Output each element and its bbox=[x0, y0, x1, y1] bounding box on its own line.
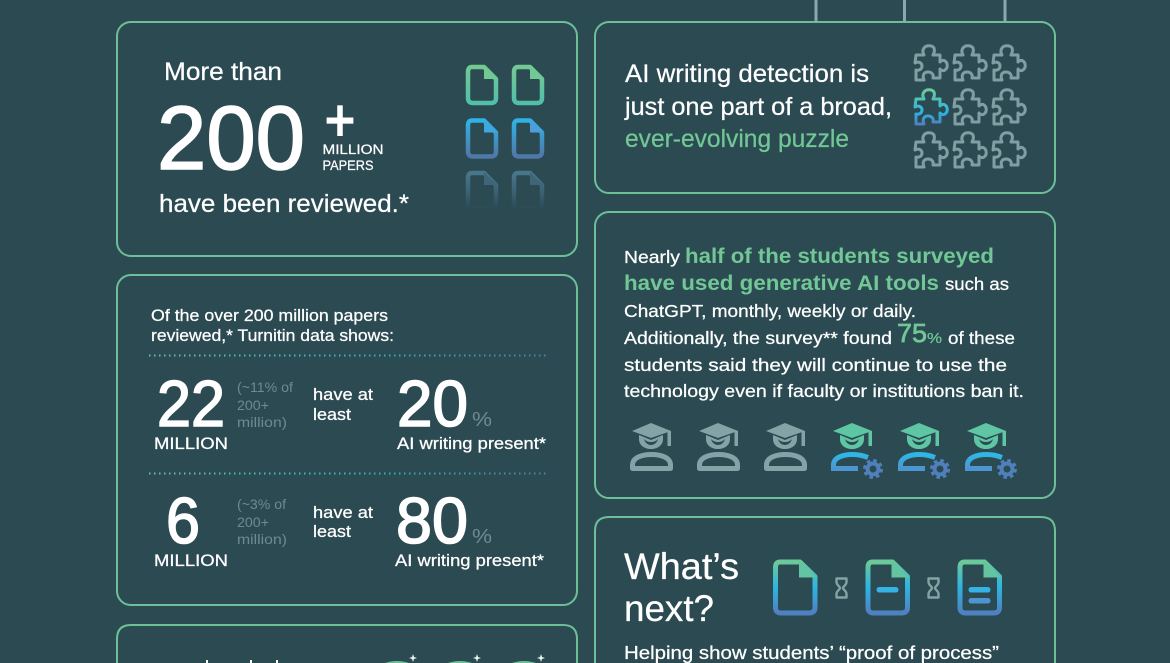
panel: students bbox=[595, 212, 1055, 498]
icon: gray student bbox=[699, 423, 738, 468]
heading text: AI writing detection is bbox=[625, 60, 869, 88]
survey paragraph: students said they will continue to use the bbox=[624, 355, 1007, 375]
heading bbox=[624, 546, 739, 629]
stat: 6 million bbox=[154, 484, 228, 570]
icon: document with two lines bbox=[960, 560, 1001, 613]
stat: 22 million: MILLION bbox=[154, 435, 228, 453]
text: have at least: have at bbox=[313, 504, 373, 522]
survey paragraph: % bbox=[927, 330, 942, 347]
survey paragraph: Nearly bbox=[624, 247, 680, 267]
intro text bbox=[151, 307, 394, 345]
icon: student with gear bbox=[967, 423, 1016, 478]
note: 11 percent: million) bbox=[237, 415, 287, 430]
million papers label bbox=[322, 142, 384, 173]
icon: gray student bbox=[766, 423, 805, 468]
survey paragraph: technology even if faculty or institutions ban it. bbox=[624, 381, 1024, 401]
heading text: ever-evolving puzzle bbox=[625, 125, 849, 153]
text: have at least bbox=[313, 504, 373, 541]
icon: sparkle circles, cropped bbox=[385, 654, 545, 663]
heading: What’s bbox=[624, 546, 739, 587]
text: have at least: least bbox=[313, 523, 351, 541]
intro text: reviewed,* Turnitin data shows: bbox=[151, 327, 394, 345]
text: have been reviewed: have been reviewed.* bbox=[159, 190, 409, 218]
note: 3 percent: million) bbox=[237, 532, 287, 547]
note: 3 percent: 200+ bbox=[237, 515, 269, 530]
note: 11 percent: (~11% of bbox=[237, 380, 293, 395]
stat: 80 percent: 80 bbox=[396, 484, 468, 557]
survey paragraph bbox=[624, 245, 1024, 401]
panel: cropped bottom-left bbox=[117, 625, 577, 663]
stat: 80 percent: % bbox=[472, 526, 492, 548]
icon: student with gear bbox=[900, 423, 948, 478]
heading: next? bbox=[624, 588, 714, 629]
stat: 20 percent: AI writing present* bbox=[397, 435, 547, 453]
survey paragraph: such as bbox=[945, 274, 1009, 294]
icon: blank document bbox=[776, 560, 816, 613]
text: have at least: least bbox=[313, 406, 351, 424]
stat: 20 percent bbox=[397, 367, 547, 453]
icon: document grid bbox=[468, 66, 543, 209]
icon: document with one line bbox=[868, 560, 909, 613]
connector lines at top bbox=[816, 0, 1005, 22]
note: 3 percent bbox=[237, 497, 287, 547]
survey paragraph: have used generative AI tools bbox=[624, 272, 939, 295]
stat: 6 million: MILLION bbox=[154, 552, 228, 570]
icon: hourglass bbox=[836, 578, 846, 598]
panel: 200 million papers bbox=[117, 22, 577, 256]
icon: hourglass bbox=[928, 578, 938, 598]
icon: gray student bbox=[632, 423, 671, 468]
heading text: just one part of a broad, bbox=[624, 93, 892, 121]
icon: student with gear bbox=[833, 423, 882, 478]
stat: 80 percent bbox=[395, 484, 545, 570]
survey paragraph: ChatGPT, monthly, weekly or daily. bbox=[624, 301, 916, 321]
stat: 20 percent: 20 bbox=[397, 367, 468, 440]
panel: puzzle bbox=[595, 22, 1055, 193]
million papers label: PAPERS bbox=[322, 158, 374, 173]
text: have at least bbox=[313, 386, 373, 424]
stat: 80 percent: AI writing present* bbox=[395, 552, 545, 570]
stat: 22 million: 22 bbox=[157, 367, 225, 440]
heading text bbox=[624, 60, 892, 153]
survey paragraph: 75 bbox=[897, 318, 927, 348]
survey paragraph: half of the students surveyed bbox=[685, 245, 994, 268]
survey paragraph: Additionally, the survey** found bbox=[624, 328, 892, 348]
note: 11 percent bbox=[237, 380, 293, 430]
intro text: Of the over 200 million papers bbox=[151, 307, 388, 325]
text: proof of process: Helping show students’ “proof of process” bbox=[624, 642, 999, 663]
big number 200: 200 bbox=[157, 89, 305, 189]
text: more than: More than bbox=[164, 58, 282, 86]
million papers label: MILLION bbox=[322, 142, 384, 157]
panel: what's next bbox=[595, 517, 1055, 663]
stat: 6 million: 6 bbox=[166, 484, 200, 557]
note: 11 percent: 200+ bbox=[237, 398, 269, 413]
text: have at least: have at bbox=[313, 386, 373, 404]
panel: Turnitin data bbox=[117, 275, 577, 605]
plus sign: + bbox=[325, 88, 355, 153]
survey paragraph: of these bbox=[948, 328, 1015, 348]
icon: puzzle grid bbox=[915, 46, 1025, 167]
note: 3 percent: (~3% of bbox=[237, 497, 286, 512]
stat: 20 percent: % bbox=[472, 409, 492, 431]
